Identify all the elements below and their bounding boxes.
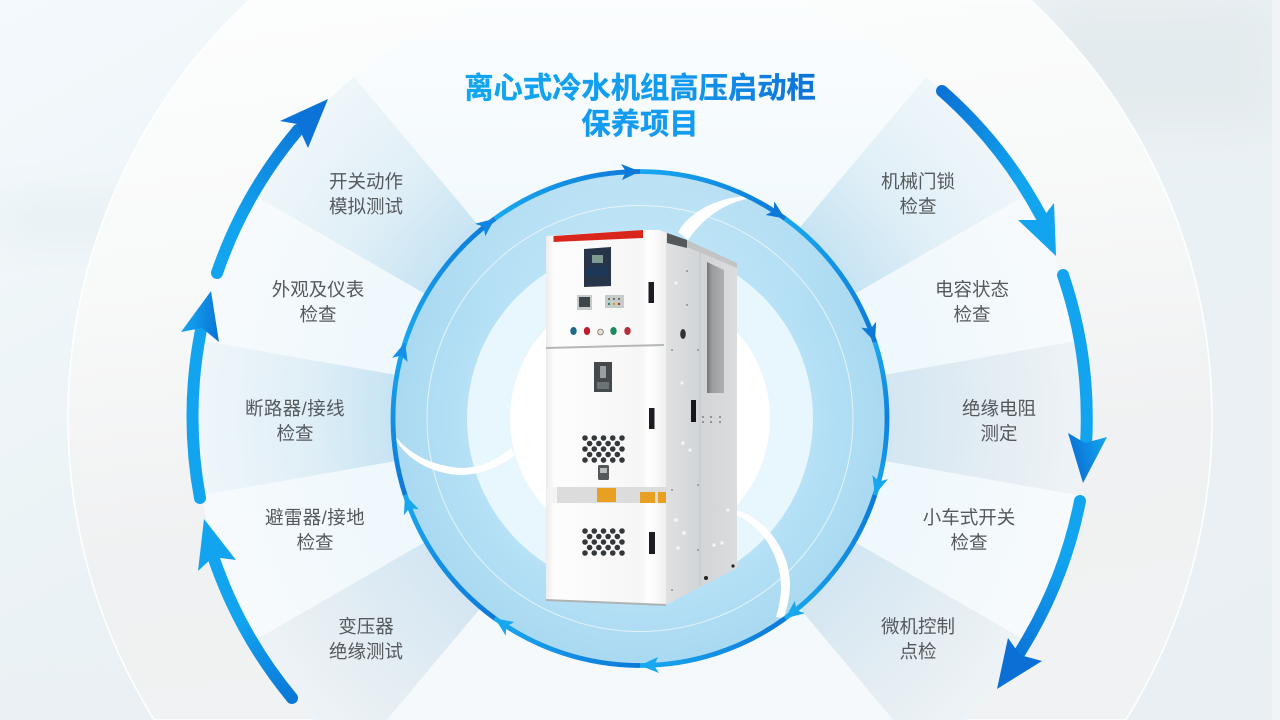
label: 绝缘电阻测定	[962, 398, 1036, 444]
upper vent	[585, 438, 623, 460]
label: 小车式开关检查: 小车式开关	[923, 507, 1015, 528]
outer arrow: left lower	[198, 519, 292, 698]
label: 机械门锁检查: 检查	[899, 196, 937, 217]
label: 变压器绝缘测试: 绝缘测试	[329, 641, 403, 662]
protection relay display	[584, 247, 611, 287]
central blue ring band	[393, 172, 887, 666]
label: 绝缘电阻测定: 测定	[980, 423, 1018, 444]
title	[464, 72, 816, 141]
white swooshes	[395, 196, 790, 618]
label: 微机控制点检: 点检	[899, 641, 937, 662]
indicator panel	[605, 295, 624, 308]
outer arrow: right upper	[942, 91, 1056, 256]
control buttons	[570, 327, 631, 335]
label: 开关动作模拟测试	[329, 171, 403, 217]
outer arrow: left middle	[181, 291, 219, 498]
label: 避雷器/接地检查	[265, 507, 365, 553]
warning labels	[597, 488, 666, 503]
label: 断路器/接线检查	[245, 398, 345, 444]
label: 外观及仪表检查	[272, 279, 364, 325]
title: 保养项目	[581, 108, 699, 141]
label: 断路器/接线检查: 断路器/接线	[245, 398, 345, 419]
label: 电容状态检查: 检查	[953, 304, 991, 325]
label: 变压器绝缘测试: 变压器	[338, 616, 394, 637]
power meter	[577, 295, 592, 310]
label: 绝缘电阻测定: 绝缘电阻	[962, 398, 1036, 419]
mid circle	[195, 0, 1085, 720]
radial sectors	[195, 77, 1085, 720]
mechanism window	[594, 362, 612, 392]
cabinet front face	[546, 230, 666, 605]
label: 电容状态检查	[935, 279, 1009, 325]
label: 断路器/接线检查: 检查	[276, 423, 314, 444]
inner circular arrows	[359, 131, 921, 706]
label: 变压器绝缘测试	[329, 616, 403, 662]
label: 机械门锁检查: 机械门锁	[881, 171, 955, 192]
label: 微机控制点检	[881, 616, 955, 662]
title: 离心式冷水机组高压启动柜	[464, 72, 816, 105]
label: 避雷器/接地检查: 避雷器/接地	[265, 507, 365, 528]
label: 机械门锁检查	[881, 171, 955, 217]
lower vent	[585, 531, 623, 553]
label: 开关动作模拟测试: 开关动作	[329, 171, 403, 192]
door dividers	[546, 344, 666, 606]
red top strip	[554, 230, 643, 242]
outer arrow: right lower	[997, 501, 1080, 689]
label: 避雷器/接地检查: 检查	[296, 532, 334, 553]
outer arrow: left upper	[217, 99, 328, 273]
label: 微机控制点检: 微机控制	[881, 616, 955, 637]
cabinet side panel	[664, 231, 737, 605]
label: 外观及仪表检查: 检查	[299, 304, 337, 325]
door handles	[648, 282, 655, 554]
outer arrow: right middle	[1063, 275, 1107, 483]
label: 小车式开关检查: 检查	[950, 532, 988, 553]
switchgear cabinet	[546, 230, 737, 606]
label: 电容状态检查: 电容状态	[935, 279, 1009, 300]
label: 开关动作模拟测试: 模拟测试	[329, 196, 403, 217]
label: 外观及仪表检查: 外观及仪表	[272, 279, 364, 300]
small key plate	[598, 465, 609, 480]
label: 小车式开关检查	[923, 507, 1015, 553]
